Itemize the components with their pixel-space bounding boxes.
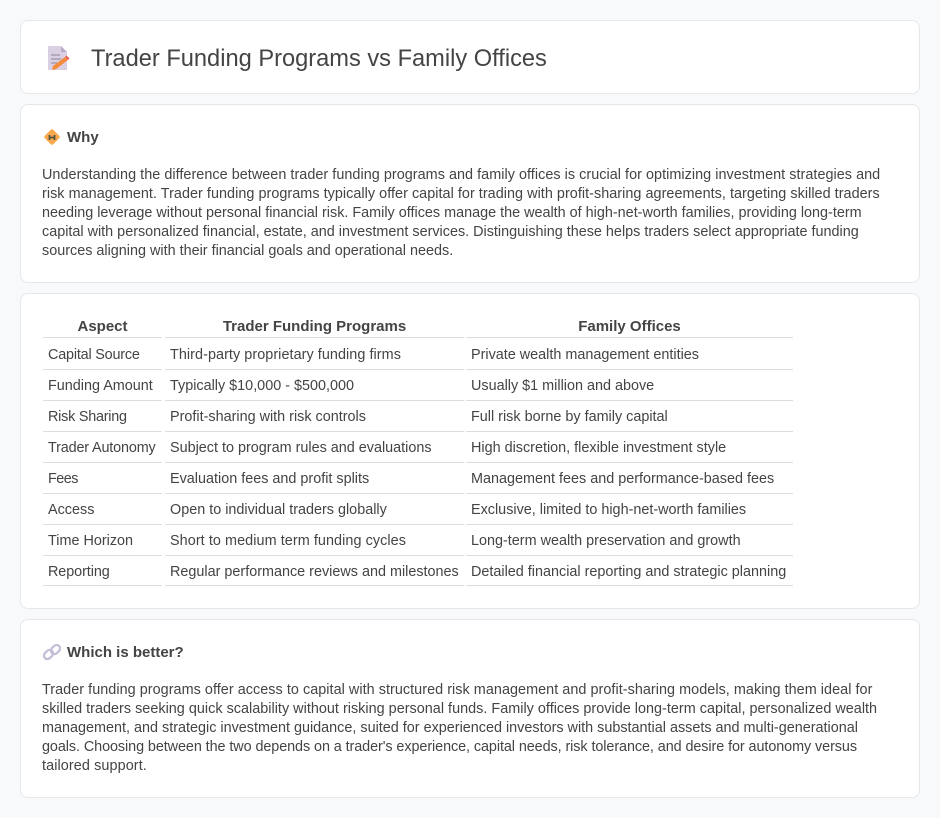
comparison table: Evaluation fees and profit splits [170, 471, 369, 487]
comparison table: Profit-sharing with risk controls [170, 409, 366, 425]
heading: why: Why [67, 129, 99, 146]
text block: why: sources aligning with their financial goals and operational needs. [42, 243, 453, 259]
comparison table: Open to individual traders globally [170, 502, 387, 518]
text block: why: needing leverage without personal financial risk. Family offices manage the wealth of high-net-worth families, providing long-term [42, 205, 862, 221]
comparison table: Subject to program rules and evaluations [170, 440, 432, 456]
comparison table: Third-party proprietary funding firms [170, 347, 401, 363]
comparison table: Funding Amount [48, 378, 153, 394]
comparison table: Family Offices [578, 318, 681, 335]
text block: which is better: Trader funding programs offer access to capital with structured risk management and profit-sharing models, making them ideal for [42, 682, 872, 698]
text block: why [42, 167, 880, 259]
comparison table: Risk Sharing [48, 409, 127, 425]
comparison table: Long-term wealth preservation and growth [471, 533, 741, 549]
icon: chain link [43, 644, 61, 660]
comparison table: Private wealth management entities [471, 347, 699, 363]
comparison table: Management fees and performance-based fees [471, 471, 774, 487]
comparison table [43, 318, 793, 586]
comparison table: Time Horizon [48, 533, 133, 549]
comparison table: Usually $1 million and above [471, 378, 654, 394]
comparison table: Trader Autonomy [48, 440, 156, 456]
text block: which is better: tailored support. [42, 758, 147, 774]
text block: why: Understanding the difference between trader funding programs and family offices is crucial for optimizing investment strategies and [42, 167, 880, 183]
comparison table: Trader Funding Programs [223, 318, 406, 335]
comparison table: Full risk borne by family capital [471, 409, 668, 425]
text block: which is better: goals. Choosing between the two depends on a trader's experience, capital needs, risk tolerance, and desire for autonomy versus [42, 739, 857, 755]
comparison table: Fees [48, 471, 78, 487]
comparison table: Regular performance reviews and milestones [170, 564, 459, 580]
comparison table: Typically $10,000 - $500,000 [170, 378, 354, 394]
panel: why [20, 104, 920, 283]
title: Trader Funding Programs vs Family Offices [91, 46, 547, 72]
comparison table: High discretion, flexible investment style [471, 440, 726, 456]
text block: which is better [42, 682, 877, 774]
icon: warning diamond [44, 129, 60, 145]
comparison table: Aspect [77, 318, 128, 335]
comparison table: Short to medium term funding cycles [170, 533, 406, 549]
text block: why: capital with personalized financial, estate, and investment services. Distinguishing these helps traders select appropriate funding [42, 224, 859, 240]
text block: why: risk management. Trader funding programs typically offer capital for trading with profit-sharing agreements, targeting skilled traders [42, 186, 880, 202]
panel: comparison table [20, 293, 920, 609]
comparison table: Access [48, 502, 94, 518]
comparison table: Exclusive, limited to high-net-worth families [471, 502, 746, 518]
panel: which is better [20, 619, 920, 798]
icon: document with pencil [48, 46, 70, 70]
comparison table: Capital Source [48, 347, 140, 363]
heading: which is better: Which is better? [67, 644, 184, 661]
comparison table: Reporting [48, 564, 110, 580]
panel: header [20, 20, 920, 94]
text block: which is better: management, and strategic investment guidance, suited for experienced investors with substantial assets and multi-generational [42, 720, 858, 736]
text block: which is better: skilled traders seeking quick scalability without risking personal funds. Family offices provide long-term capital, personalized wealth [42, 701, 877, 717]
comparison table: Detailed financial reporting and strategic planning [471, 564, 786, 580]
